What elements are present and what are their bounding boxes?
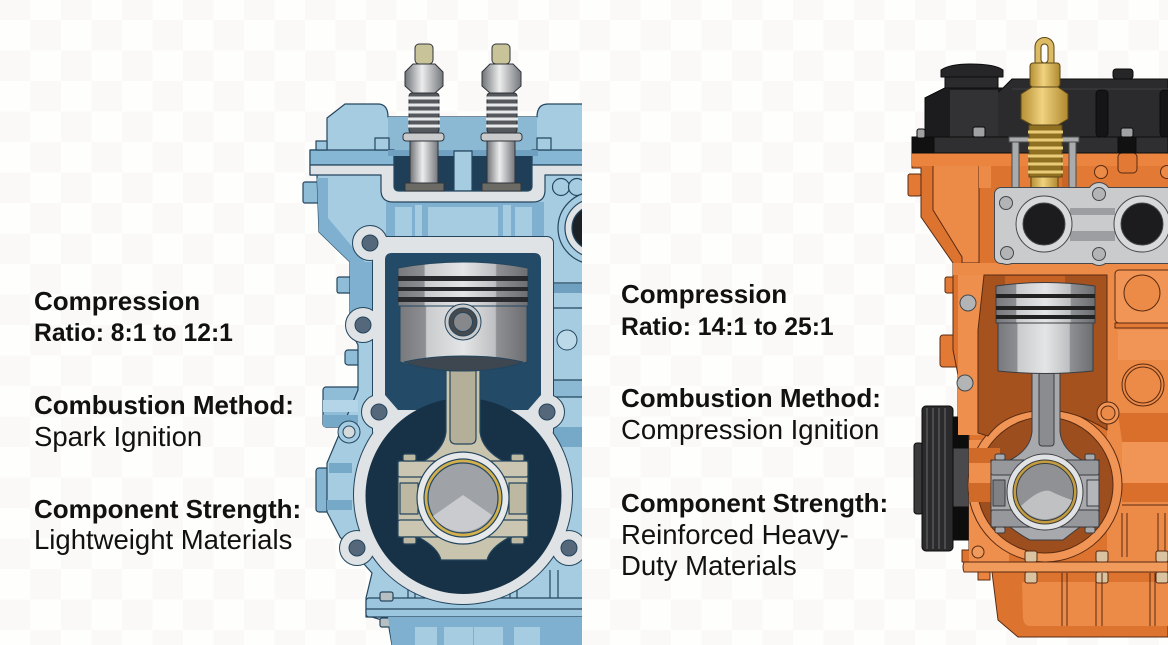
text block: diesel specifications bbox=[621, 279, 888, 581]
pulley bbox=[914, 406, 971, 551]
diesel connecting rod bbox=[991, 365, 1099, 540]
text block: gasoline specifications bbox=[34, 286, 301, 555]
connecting rod bbox=[398, 360, 528, 560]
bolt lugs bbox=[349, 235, 577, 556]
spec: combustion method: Compression Ignition bbox=[621, 414, 879, 445]
spec: component strength: Duty Materials bbox=[621, 550, 797, 581]
gasket channel bbox=[310, 165, 590, 202]
valve right bbox=[481, 44, 522, 191]
cylinder pocket bbox=[968, 275, 1122, 562]
spec: component strength: Lightweight Materials bbox=[34, 524, 292, 555]
engine body: blue block bbox=[302, 103, 582, 645]
spec: component strength: Reinforced Heavy- bbox=[621, 519, 849, 550]
gasket frame and crank bore bbox=[340, 226, 586, 604]
valve left bbox=[403, 44, 444, 191]
bracket legs bbox=[1009, 137, 1079, 189]
panel: gasoline engine illustration bbox=[302, 44, 582, 645]
spec: compression ratio: Ratio: 8:1 to 12:1 bbox=[34, 320, 233, 347]
spec: compression ratio: Ratio: 14:1 to 25:1 bbox=[621, 314, 834, 341]
dark cylinder bore bbox=[385, 253, 541, 410]
spark plugs and valves bbox=[403, 44, 522, 191]
small boss bbox=[338, 421, 360, 443]
flange caps bbox=[310, 150, 394, 165]
diesel piston bbox=[996, 282, 1095, 374]
spec: component strength: Component Strength: bbox=[621, 488, 888, 518]
lower ribs bbox=[408, 570, 558, 600]
intake manifold plate bbox=[957, 183, 1168, 391]
black valve cover bbox=[912, 64, 1168, 153]
spec: compression ratio: Compression bbox=[34, 286, 200, 316]
spec: combustion method: Combustion Method: bbox=[621, 383, 881, 413]
dark valve pocket bbox=[394, 155, 532, 191]
sump pan bbox=[963, 546, 1168, 637]
small circle port bbox=[557, 330, 577, 350]
spec: combustion method: Combustion Method: bbox=[34, 390, 294, 420]
orange block bbox=[908, 153, 1168, 565]
spec: component strength: Component Strength: bbox=[34, 494, 301, 524]
spec: combustion method: Spark Ignition bbox=[34, 421, 202, 452]
spark plug brass bbox=[1021, 38, 1068, 189]
rib panels bbox=[386, 202, 544, 236]
piston bbox=[398, 262, 528, 371]
spec: compression ratio: Compression bbox=[621, 279, 787, 309]
panel: diesel engine illustration bbox=[908, 38, 1168, 637]
right side panels bbox=[1115, 270, 1168, 323]
